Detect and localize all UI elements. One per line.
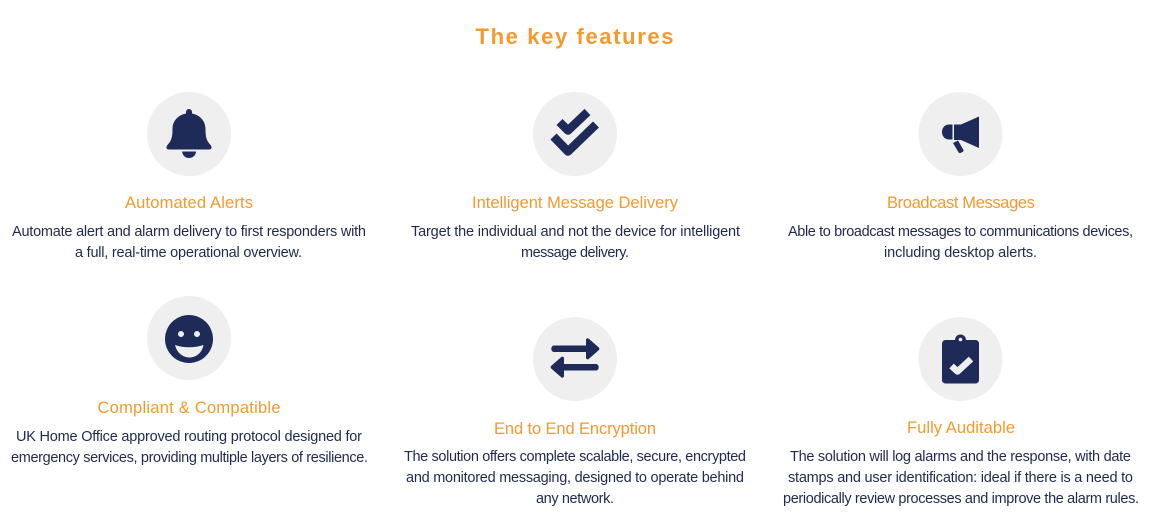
panel: broadcast messages	[788, 92, 1133, 261]
panel: compliant and compatible	[11, 296, 368, 466]
text block	[788, 224, 1133, 261]
text block	[404, 449, 746, 507]
icon: smiley face	[147, 296, 231, 380]
text block: including desktop alerts.	[884, 245, 1037, 261]
icon: megaphone	[918, 92, 1002, 176]
text block	[411, 224, 740, 261]
text block: message delivery.	[521, 245, 629, 261]
text block: Able to broadcast messages to communications devices,	[788, 224, 1133, 240]
text block: any network.	[536, 491, 614, 507]
text block	[12, 224, 366, 261]
panel: fully auditable	[783, 317, 1139, 507]
text block: a full, real-time operational overview.	[75, 245, 302, 261]
icon: exchange arrows	[533, 317, 617, 401]
text block: The solution will log alarms and the response, with date	[790, 449, 1131, 465]
text block: Automate alert and alarm delivery to first responders with	[12, 224, 366, 240]
text block: and monitored messaging, designed to operate behind	[406, 470, 744, 486]
icon: clipboard check	[918, 317, 1002, 401]
heading: End to End Encryption	[494, 420, 656, 438]
heading: Broadcast Messages	[887, 194, 1035, 212]
text block: Target the individual and not the device for intelligent	[411, 224, 740, 240]
heading: Fully Auditable	[907, 419, 1015, 437]
title: The key features	[476, 24, 674, 49]
text block	[11, 429, 368, 466]
text block: stamps and user identification: ideal if there is a need to	[788, 470, 1133, 486]
icon: bell	[147, 92, 231, 176]
text block: UK Home Office approved routing protocol designed for	[16, 429, 362, 445]
heading: Compliant & Compatible	[98, 399, 280, 417]
panel: automated alerts	[12, 92, 366, 261]
text block: emergency services, providing multiple layers of resilience.	[11, 450, 368, 466]
text block: periodically review processes and improve the alarm rules.	[783, 491, 1139, 507]
text block: The solution offers complete scalable, secure, encrypted	[404, 449, 746, 465]
heading: Automated Alerts	[125, 194, 253, 212]
heading: Intelligent Message Delivery	[472, 194, 679, 212]
panel: intelligent message delivery	[411, 92, 740, 261]
text block	[783, 449, 1139, 507]
icon: double check	[533, 92, 617, 176]
panel: end to end encryption	[404, 317, 746, 507]
